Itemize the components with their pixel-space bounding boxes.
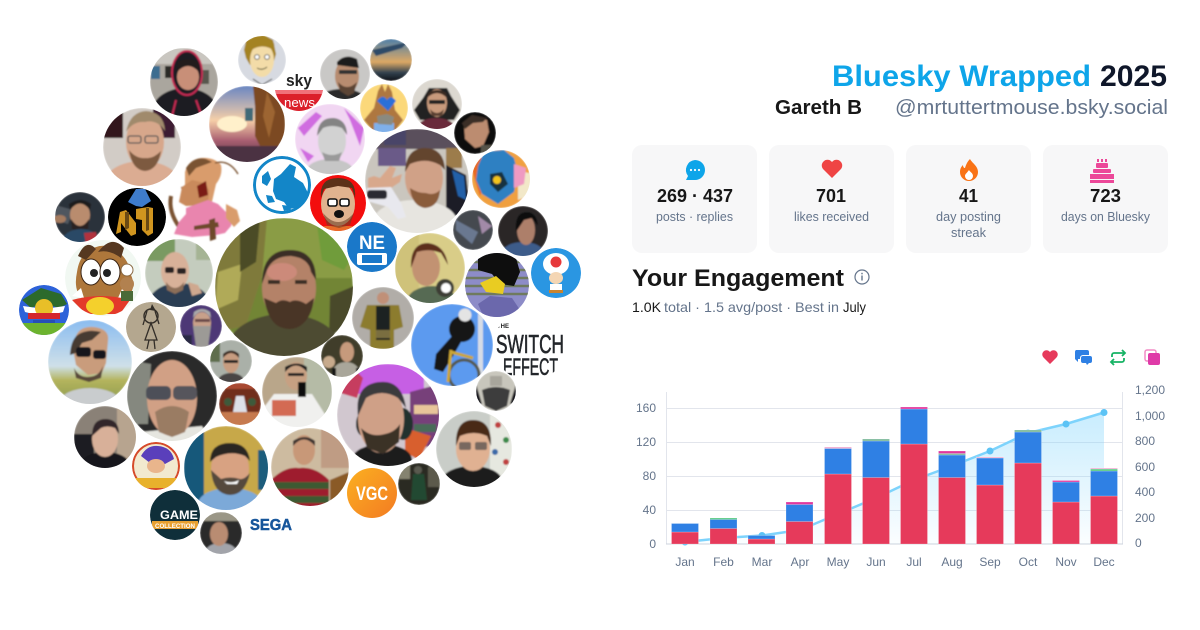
- right axis labels: 0: [1135, 536, 1142, 550]
- avatar: bald man with glasses: [145, 239, 213, 307]
- right axis labels: 400: [1135, 485, 1155, 499]
- left axis labels: 160: [636, 401, 656, 415]
- icon: legend reposts: [1111, 350, 1125, 365]
- stat label: likes received: [794, 209, 869, 224]
- avatar: blue hedgehog art: [472, 150, 532, 208]
- avatar: man in plaid shirt: [352, 287, 414, 349]
- avatar: the switch effect logo: SWITCH: [496, 329, 564, 359]
- title: 2025: [1100, 60, 1167, 93]
- avatar: the switch effect logo: [494, 309, 566, 381]
- month labels: Nov: [1055, 555, 1077, 569]
- avatar: man holding game controller: [365, 129, 469, 233]
- stat label: [936, 209, 1001, 240]
- icon: legend heart: [1042, 350, 1058, 364]
- avatar: europe map: [254, 158, 310, 212]
- left axis labels: 80: [643, 469, 656, 483]
- month labels: [675, 555, 1115, 569]
- right axis labels: 800: [1135, 434, 1155, 448]
- stat label: day posting: [936, 209, 1001, 224]
- month labels: Jul: [906, 555, 922, 569]
- stat value: 41: [959, 186, 978, 206]
- avatar: small bald man: [200, 512, 242, 554]
- avatar: grey man pink background: [295, 104, 365, 174]
- avatar: the switch effect logo: THE: [497, 324, 509, 330]
- avatar: sky news logo: sky: [286, 71, 312, 90]
- icon: heart: [822, 160, 842, 178]
- stat label: days on Bluesky: [1061, 209, 1150, 224]
- avatar: large central man in forest: [215, 218, 353, 356]
- avatar: man with rainbow t-shirt: [262, 357, 332, 430]
- bar: Feb: [710, 518, 737, 544]
- bar: Aug: [938, 451, 966, 544]
- month labels: Dec: [1093, 555, 1115, 569]
- avatar: sunset sky: [370, 39, 412, 81]
- right axis labels: 200: [1135, 511, 1155, 525]
- avatar: dark scene with streaks: [453, 210, 493, 250]
- avatar: small man with glasses outdoors: [210, 340, 252, 382]
- avatar: man in gaming chair: [412, 79, 462, 129]
- left axis labels: [636, 401, 656, 551]
- bar: Dec: [1090, 468, 1118, 544]
- avatar: shirtless man with glasses: [103, 108, 181, 186]
- panel: day posting streak: [906, 145, 1031, 253]
- left axis labels: 0: [649, 537, 656, 551]
- avatar: goomba: [65, 240, 141, 316]
- icon: birthday cake: [1090, 159, 1114, 183]
- avatar: bald man large glasses: [127, 351, 217, 446]
- bar: Sep: [976, 457, 1004, 544]
- display name: Gareth B: [775, 97, 862, 119]
- avatar: tomb raider heroine: [395, 233, 465, 303]
- right axis labels: [1135, 383, 1165, 550]
- avatar: simpsons-style character: [465, 252, 529, 318]
- avatar: VGC logo: VGC: [356, 484, 388, 505]
- engagement summary: total · 1.5 avg/post · Best in: [664, 299, 839, 315]
- stat value: 723: [1090, 186, 1121, 206]
- avatar: man dark hair selfie: [74, 406, 136, 468]
- avatar: the game collection logo: GAME: [160, 508, 198, 522]
- avatar: man with headphones: [337, 364, 440, 476]
- chart legend: [1042, 350, 1160, 365]
- avatar: the switch effect logo: EFFECT: [503, 354, 558, 381]
- right axis labels: 600: [1135, 460, 1155, 474]
- bar: Jul: [900, 407, 928, 544]
- avatar: red hood man: [150, 48, 218, 116]
- avatar: man in car: [55, 192, 105, 242]
- avatar: smiling bearded man in blue: [184, 426, 268, 510]
- month labels: Feb: [713, 555, 734, 569]
- bar: Jun: [862, 439, 890, 544]
- bar: Oct: [1014, 430, 1042, 544]
- avatar: VGC logo: [347, 468, 397, 518]
- title: Bluesky Wrapped: [832, 60, 1091, 93]
- cumulative line: [682, 409, 1108, 546]
- avatar: man in beanie: [320, 49, 370, 99]
- right axis labels: 1,200: [1135, 383, 1165, 397]
- bar: Apr: [786, 502, 813, 544]
- panel: posts and replies: [632, 145, 757, 253]
- avatar: sky news logo: [275, 71, 323, 111]
- avatar: sky news logo: news: [284, 95, 315, 110]
- avatar: toad: [531, 248, 581, 298]
- avatar: mountain climber sunset: [209, 86, 285, 163]
- panel: likes received: [769, 145, 894, 253]
- stat value: 269 · 437: [657, 186, 733, 206]
- avatar: N64 logo: [108, 188, 166, 246]
- avatar: man on black background: [454, 112, 496, 154]
- avatar: small man smiling: [321, 335, 363, 382]
- avatar: man in striped sweater: [271, 428, 349, 508]
- avatar cluster: [19, 35, 581, 559]
- avatar: kangaroo with heart: [360, 84, 408, 133]
- engagement summary: July: [843, 299, 866, 315]
- avatar: the game collection logo: COLLECTION: [155, 523, 195, 530]
- avatar: sonic badge: [19, 285, 69, 337]
- avatar: sketch figure: [126, 302, 176, 352]
- avatar: dark art portrait: [498, 206, 548, 256]
- month labels: Oct: [1019, 555, 1038, 569]
- engagement chart: [636, 383, 1165, 569]
- icon: speech bubble: [686, 160, 705, 180]
- icon: flame: [960, 159, 978, 181]
- heading: your engagement: Your Engagement: [632, 265, 844, 292]
- avatar: cyclist: [411, 304, 493, 390]
- avatar: anniversary badge: [133, 443, 179, 489]
- avatar: NE logo: NE: [359, 233, 385, 254]
- bar: Nov: [1052, 480, 1080, 544]
- icon: info: [855, 270, 869, 284]
- stat label: posts · replies: [656, 209, 733, 224]
- month labels: Aug: [941, 555, 963, 569]
- handle: @mrtuttertmouse.bsky.social: [895, 97, 1168, 119]
- left axis labels: 120: [636, 435, 656, 449]
- bar: May: [824, 447, 852, 544]
- left axis labels: 40: [643, 503, 656, 517]
- month labels: Mar: [752, 555, 772, 569]
- bar: Jan: [672, 524, 698, 544]
- grid and axes: [666, 392, 1123, 544]
- icon: legend replies: [1075, 350, 1092, 365]
- avatar: SEGA logo: SEGA: [250, 517, 292, 534]
- cumulative area: [685, 412, 1104, 544]
- engagement summary: 1.0K: [632, 299, 662, 315]
- avatar: the game collection logo: [150, 490, 200, 540]
- month labels: Jan: [675, 555, 695, 569]
- icon: legend quotes: [1145, 350, 1160, 365]
- panel: days on Bluesky: [1043, 145, 1168, 253]
- avatar: man with glasses and black shirt: [436, 411, 512, 496]
- avatar: person in green: [398, 463, 440, 505]
- avatar: red mii character: [310, 175, 366, 231]
- right axis labels: 1,000: [1135, 409, 1165, 423]
- avatar: street fighter character: [170, 158, 240, 241]
- stat value: 701: [816, 186, 846, 206]
- month labels: Apr: [791, 555, 809, 569]
- avatar: man with long grey beard: [180, 305, 222, 349]
- month labels: Jun: [866, 555, 886, 569]
- month labels: Sep: [979, 555, 1001, 569]
- avatar: beard photo: [476, 371, 516, 411]
- avatar: cartoon blond: [238, 35, 286, 85]
- avatar: NE logo: [347, 222, 397, 272]
- month labels: May: [827, 555, 849, 569]
- stacked bars: [672, 407, 1118, 544]
- avatar: man with sunglasses: [48, 320, 132, 404]
- stat label: streak: [951, 225, 986, 240]
- avatar: restaurant scene: [219, 383, 261, 427]
- bar: Mar: [748, 536, 775, 544]
